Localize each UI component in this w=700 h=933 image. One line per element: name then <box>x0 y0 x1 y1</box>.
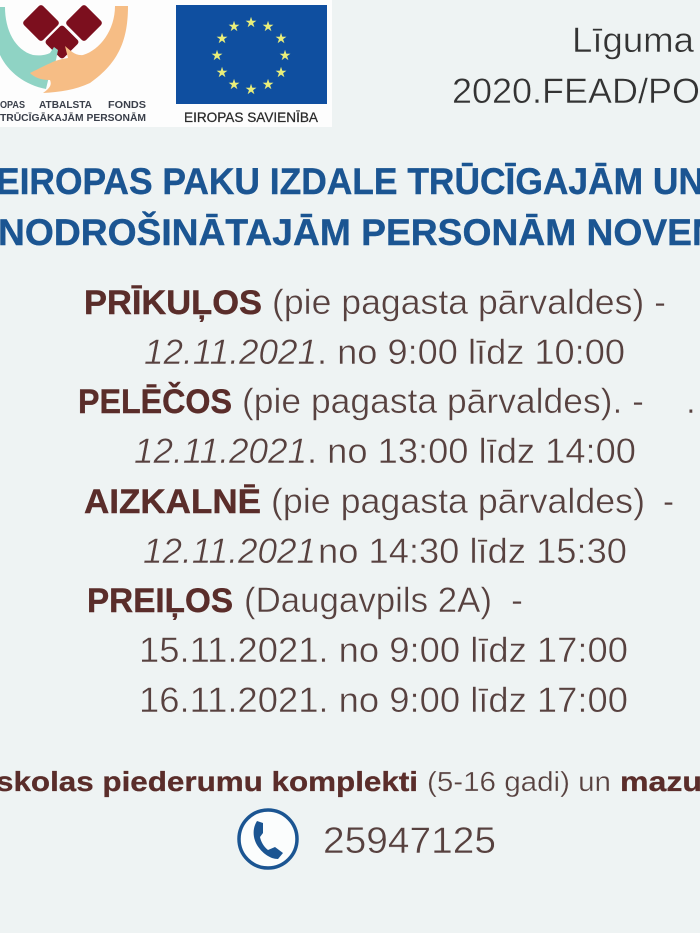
icon: EU flag: ★ <box>216 64 228 80</box>
icon: EU flag: ★ <box>275 30 287 46</box>
icon: FEAD hands and diamonds logo <box>0 4 128 93</box>
location: Prīkuļos <box>84 283 666 372</box>
icon: EU flag: ★ <box>216 30 228 46</box>
location: Prīkuļos: . no 9:00 līdz 10:00 <box>317 333 625 372</box>
logo caption: TRŪCĪGĀKAJĀM PERSONĀM <box>0 112 146 124</box>
icon: EU flag <box>176 5 327 104</box>
icon: EU flag: ★ <box>211 47 223 63</box>
location: Aizkalnē <box>84 482 674 571</box>
location: Preiļos: PREIĻOS <box>87 582 233 620</box>
location: Pelēčos: (pie pagasta pārvaldes). - <box>242 382 644 421</box>
location: Preiļos: 15.11.2021. no 9:00 līdz 17:00 <box>139 631 628 670</box>
icon: EU flag: ★ <box>279 47 291 63</box>
location: Pelēčos <box>78 382 696 471</box>
icon: EU flag: ★ <box>275 64 287 80</box>
icon: EU flag: ★ <box>228 76 240 92</box>
flag caption: EIROPAS SAVIENĪBA <box>184 109 319 125</box>
logo caption: FONDS <box>108 99 146 111</box>
logo panel: white background with both logos <box>0 0 332 127</box>
logo caption: ATBALSTA <box>39 99 92 111</box>
location: Preiļos: - <box>511 581 523 620</box>
location: Pelēčos: 12.11.2021 <box>134 432 307 471</box>
note on school supplies: mazu <box>620 766 700 797</box>
icon: telephone <box>239 810 297 868</box>
icon: EU flag: ★ <box>245 81 257 97</box>
location: Aizkalnē: AIZKALNĒ <box>84 483 261 521</box>
note on school supplies <box>0 766 700 797</box>
location: Preiļos: 16.11.2021. no 9:00 līdz 17:00 <box>139 681 628 720</box>
distribution schedule <box>78 283 696 720</box>
location: Pelēčos: PELĒČOS <box>78 382 232 421</box>
icon: EU flag: ★ <box>228 18 240 34</box>
title: NODROŠINĀTAJĀM PERSONĀM NOVEM <box>0 211 700 253</box>
contract reference text: 2020.FEAD/PO <box>452 72 700 111</box>
icon: EU flag: ★ <box>262 76 274 92</box>
icon: EU flag: ★ <box>262 18 274 34</box>
logo caption: OPAS <box>0 99 25 111</box>
location: Prīkuļos: (pie pagasta pārvaldes) - <box>272 283 666 322</box>
logo caption <box>0 99 146 124</box>
location: Pelēčos: . no 13:00 līdz 14:00 <box>307 432 636 471</box>
note on school supplies: skolas piederumu komplekti <box>0 766 418 797</box>
location: Pelēčos: . <box>686 382 696 421</box>
location: Aizkalnē: (pie pagasta pārvaldes) <box>271 482 645 521</box>
location: Preiļos <box>87 581 628 720</box>
location: Prīkuļos: PRĪKUĻOS <box>84 284 262 322</box>
location: Aizkalnē: - <box>663 482 674 521</box>
contract reference text <box>452 21 700 111</box>
location: Preiļos: (Daugavpils 2A) <box>244 581 492 620</box>
icon: EU flag: ★ <box>245 14 257 30</box>
phone number: 25947125 <box>323 820 496 861</box>
contract reference text: Līguma <box>572 21 695 60</box>
location: Prīkuļos: 12.11.2021 <box>144 333 317 372</box>
title <box>0 161 700 253</box>
note on school supplies: (5-16 gadi) un <box>427 766 611 797</box>
location: Aizkalnē: 12.11.2021 <box>143 532 316 571</box>
location: Aizkalnē: no 14:30 līdz 15:30 <box>318 532 627 571</box>
